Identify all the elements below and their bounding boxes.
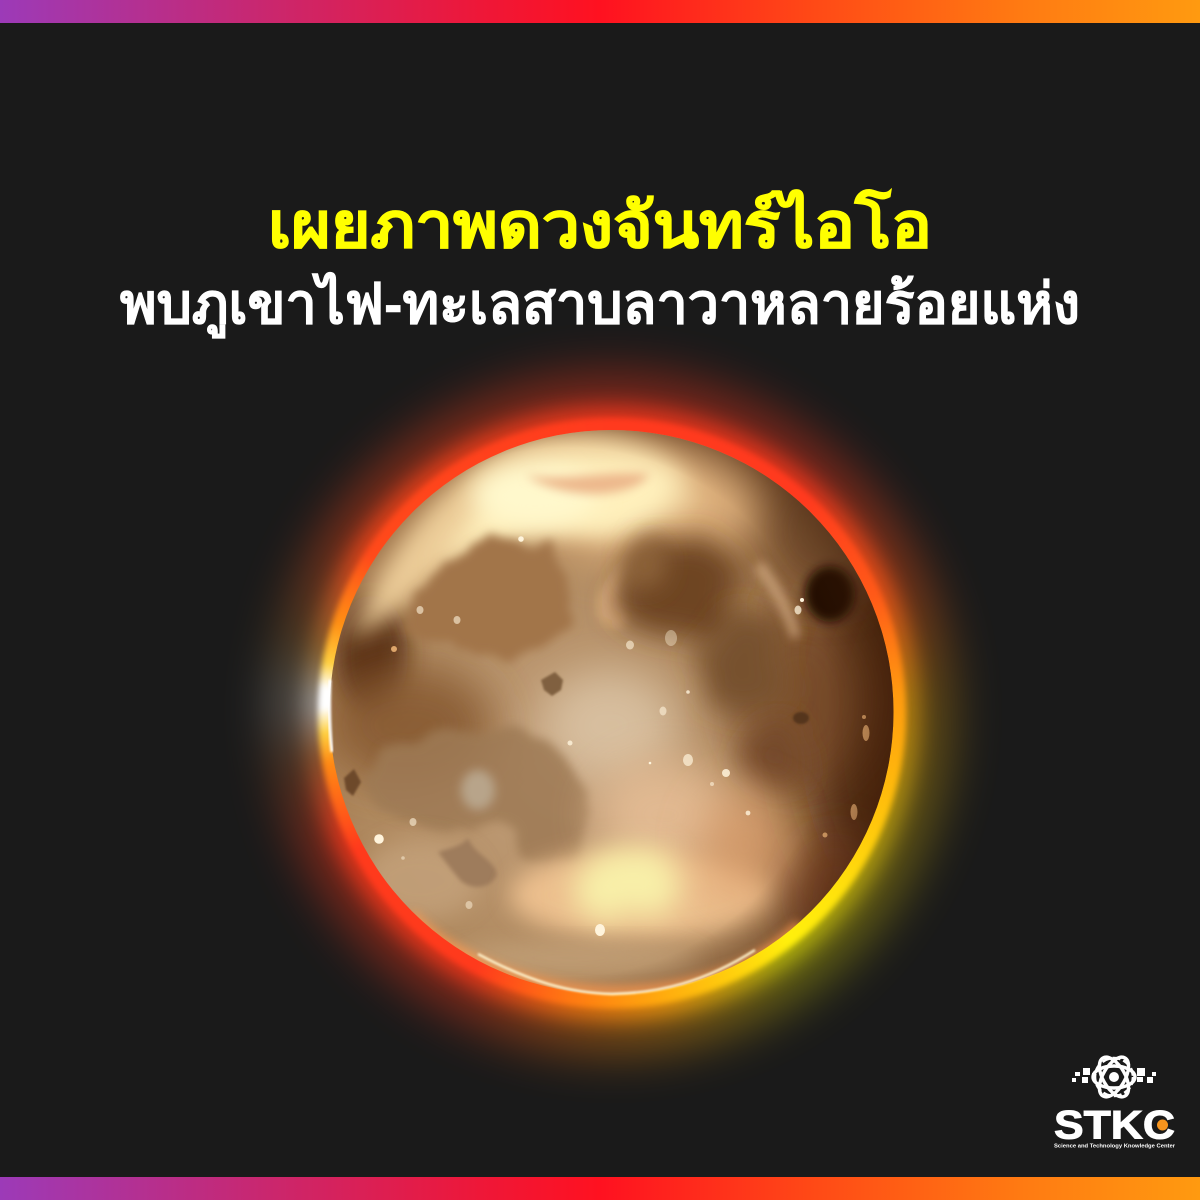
thin white rim at the left: [330, 680, 332, 752]
lower-left lobe: [438, 838, 497, 887]
bright speckles: [374, 536, 804, 936]
dark crater top right: [805, 566, 855, 622]
top gradient bar: [0, 0, 1200, 23]
small dark craters: [344, 672, 809, 796]
lower-left tan ground: [360, 840, 480, 920]
bottom gradient bar: [0, 1177, 1200, 1200]
logo wordmark: STKC: [1054, 1104, 1175, 1148]
pale central haze: [542, 670, 678, 780]
bright upper cloud: [350, 431, 760, 640]
lower right dark patches: [738, 725, 802, 785]
logo tagline: Science and Technology Knowledge Center: [1054, 1144, 1175, 1150]
thin white rim at the bottom: [478, 950, 755, 994]
moon base surface: [330, 430, 894, 994]
dark right and left limb shading: [325, 460, 1010, 955]
warm lower glow: [595, 760, 735, 870]
rim shading: [526, 430, 894, 988]
pale streak beside crater: [755, 560, 800, 640]
title: เผยภาพดวงจันทร์ไอโอ: [268, 188, 932, 261]
bottom rim highlight: [410, 915, 800, 992]
logo atom icon: [1093, 1052, 1135, 1102]
logo orange dot: [1157, 1120, 1168, 1130]
title: พบภูเขาไฟ-ทะเลสาบลาวาหลายร้อยแห่ง: [120, 271, 1080, 339]
moon outer glow: [247, 342, 979, 1084]
logo: STKC: [1054, 1055, 1175, 1150]
brown upper-right highland: [620, 538, 786, 715]
brown upper-left highland: [402, 533, 572, 658]
moon: [328, 430, 894, 997]
title: [120, 188, 1080, 339]
lower-left brown region: [364, 729, 588, 865]
logo pixel squares: [1072, 1068, 1156, 1083]
